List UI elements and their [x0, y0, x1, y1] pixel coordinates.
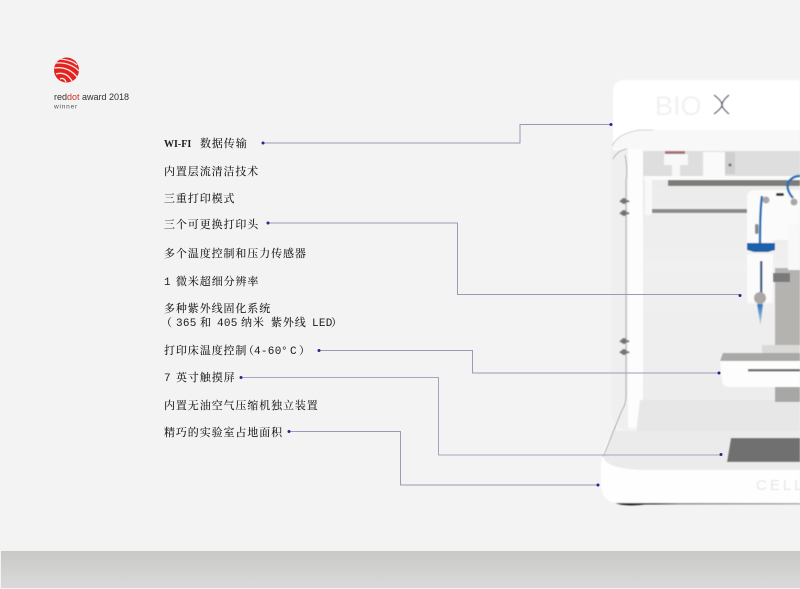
- feature: resolution: 1: [164, 277, 171, 289]
- feature: UV wavelengths: 405: [217, 318, 238, 330]
- feature: compressor: 内置无油空气压缩机独立装置: [164, 398, 319, 412]
- print bed: [720, 353, 800, 387]
- feature: bed temperature: ）: [299, 344, 311, 357]
- award text: reddot award 2018: [54, 92, 129, 102]
- lower hinge: [620, 338, 629, 355]
- award mark: [54, 58, 79, 82]
- callout: print heads: [266, 222, 742, 297]
- upper hinge: [620, 198, 629, 216]
- feature: UV wavelengths: （: [161, 317, 173, 329]
- callout: touch screen: [240, 376, 722, 456]
- syringe: [747, 254, 773, 326]
- printer base: [601, 433, 800, 503]
- lower lip of housing: [612, 130, 800, 151]
- build platform: [636, 400, 800, 433]
- feature: UV wavelengths: ）: [331, 316, 343, 329]
- floor band: [1, 551, 800, 588]
- callout: bed temperature: [318, 349, 720, 374]
- chamber interior: [643, 150, 800, 435]
- column below bed: [775, 387, 800, 402]
- blue clamp: [747, 243, 775, 252]
- callout: wifi: [262, 123, 612, 144]
- touch screen: [727, 438, 800, 462]
- feature: laminar flow: 内置层流清洁技术: [164, 164, 259, 178]
- callout: footprint: [288, 430, 600, 486]
- feature: resolution: 微米超细分辨率: [176, 274, 259, 288]
- right column: [773, 268, 800, 352]
- feature: print modes: 三重打印模式: [164, 191, 235, 205]
- feature: wifi: 数据传输: [200, 136, 248, 150]
- feature: print heads: 三个可更换打印头: [164, 217, 259, 231]
- blue tubes: [760, 176, 800, 243]
- base top panel: [604, 431, 800, 470]
- feature: UV wavelengths: 365: [176, 318, 197, 330]
- left pillar: [628, 149, 643, 428]
- feature: bed temperature: 4-60: [254, 346, 282, 358]
- rear shelf: [643, 150, 800, 176]
- top carriage blocks: [664, 151, 735, 176]
- feature: UV wavelengths: LED: [312, 318, 333, 330]
- gantry: [644, 176, 800, 215]
- feature: bed temperature: °: [281, 346, 288, 358]
- dish on bed: [762, 345, 800, 354]
- front glass edge: [612, 130, 653, 146]
- feature: touch screen: 英寸触摸屏: [176, 370, 236, 384]
- printer illustration: [601, 80, 800, 505]
- feature: UV wavelengths: 纳米: [241, 315, 265, 329]
- feature: bed temperature: 打印床温度控制: [164, 345, 247, 357]
- left glass door: [611, 150, 636, 432]
- feature: bed temperature: （: [243, 344, 255, 357]
- feature: UV curing: 多种紫外线固化系统: [164, 301, 271, 315]
- feature: footprint: 精巧的实验室占地面积: [164, 425, 283, 439]
- feature: bed temperature: C: [290, 346, 297, 358]
- feature: UV wavelengths: 紫外线: [271, 315, 307, 329]
- door wire outline: [603, 149, 627, 457]
- feature: UV wavelengths: 和: [200, 316, 212, 329]
- feature list: [161, 136, 343, 439]
- print head carriage: [747, 190, 800, 270]
- feature: wifi: WI-FI: [164, 139, 191, 150]
- winner text: winner: [53, 104, 78, 110]
- brand mark: BIO X: [655, 91, 729, 121]
- printer foot shadow: [615, 503, 800, 505]
- brand mark: BIO X: BIO: [655, 91, 702, 121]
- printer top housing: [613, 80, 800, 150]
- feature: sensors: 多个温度控制和压力传感器: [164, 246, 307, 260]
- award logo: [53, 58, 129, 110]
- feature: touch screen: 7: [164, 373, 171, 385]
